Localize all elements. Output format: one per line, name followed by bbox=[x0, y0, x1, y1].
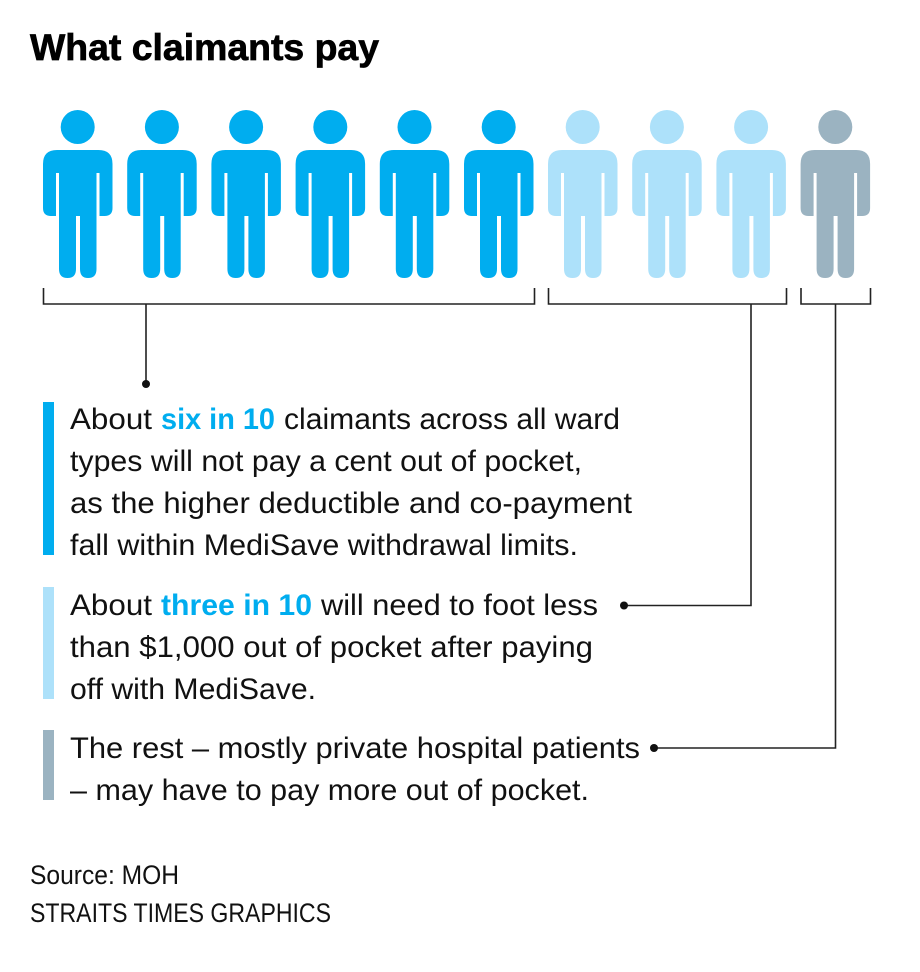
text block: three in 10: About bbox=[70, 589, 153, 622]
text block: six in 10 bbox=[70, 403, 633, 562]
bracket and leader: three in 10 bbox=[548, 288, 786, 610]
colour bar: three in 10 bbox=[43, 587, 54, 699]
source credit bbox=[30, 860, 331, 928]
text block: six in 10: About bbox=[70, 403, 153, 436]
text block: six in 10: six in 10 bbox=[161, 403, 275, 436]
text block: six in 10: fall within MediSave withdrawal limits. bbox=[70, 529, 578, 562]
source credit: STRAITS TIMES GRAPHICS bbox=[30, 898, 331, 928]
text block: three in 10 bbox=[70, 589, 598, 706]
bracket and leader: six in 10 bbox=[44, 288, 534, 388]
colour bar: six in 10 bbox=[43, 402, 54, 555]
pictogram: six dark blue people bbox=[43, 110, 534, 278]
text block: six in 10: claimants across all ward bbox=[284, 403, 620, 436]
source credit: Source: MOH bbox=[30, 860, 179, 890]
bracket and leader: the rest bbox=[650, 288, 870, 752]
text block: the rest: – may have to pay more out of pocket. bbox=[70, 774, 589, 807]
text block: three in 10: off with MediSave. bbox=[70, 673, 316, 706]
text block: the rest bbox=[70, 732, 640, 807]
pictogram: three light blue people bbox=[548, 110, 786, 278]
text block: three in 10: three in 10 bbox=[161, 589, 312, 622]
text block: six in 10: types will not pay a cent out of pocket, bbox=[70, 445, 582, 478]
text block: three in 10: than $1,000 out of pocket after paying bbox=[70, 631, 593, 664]
text block: three in 10: will need to foot less bbox=[320, 589, 598, 622]
title: What claimants pay bbox=[30, 27, 379, 68]
text block: six in 10: as the higher deductible and co-payment bbox=[70, 487, 633, 520]
colour bar: the rest bbox=[43, 730, 54, 800]
text block: the rest: The rest – mostly private hospital patients bbox=[70, 732, 640, 765]
pictogram: one grey person bbox=[801, 110, 870, 278]
